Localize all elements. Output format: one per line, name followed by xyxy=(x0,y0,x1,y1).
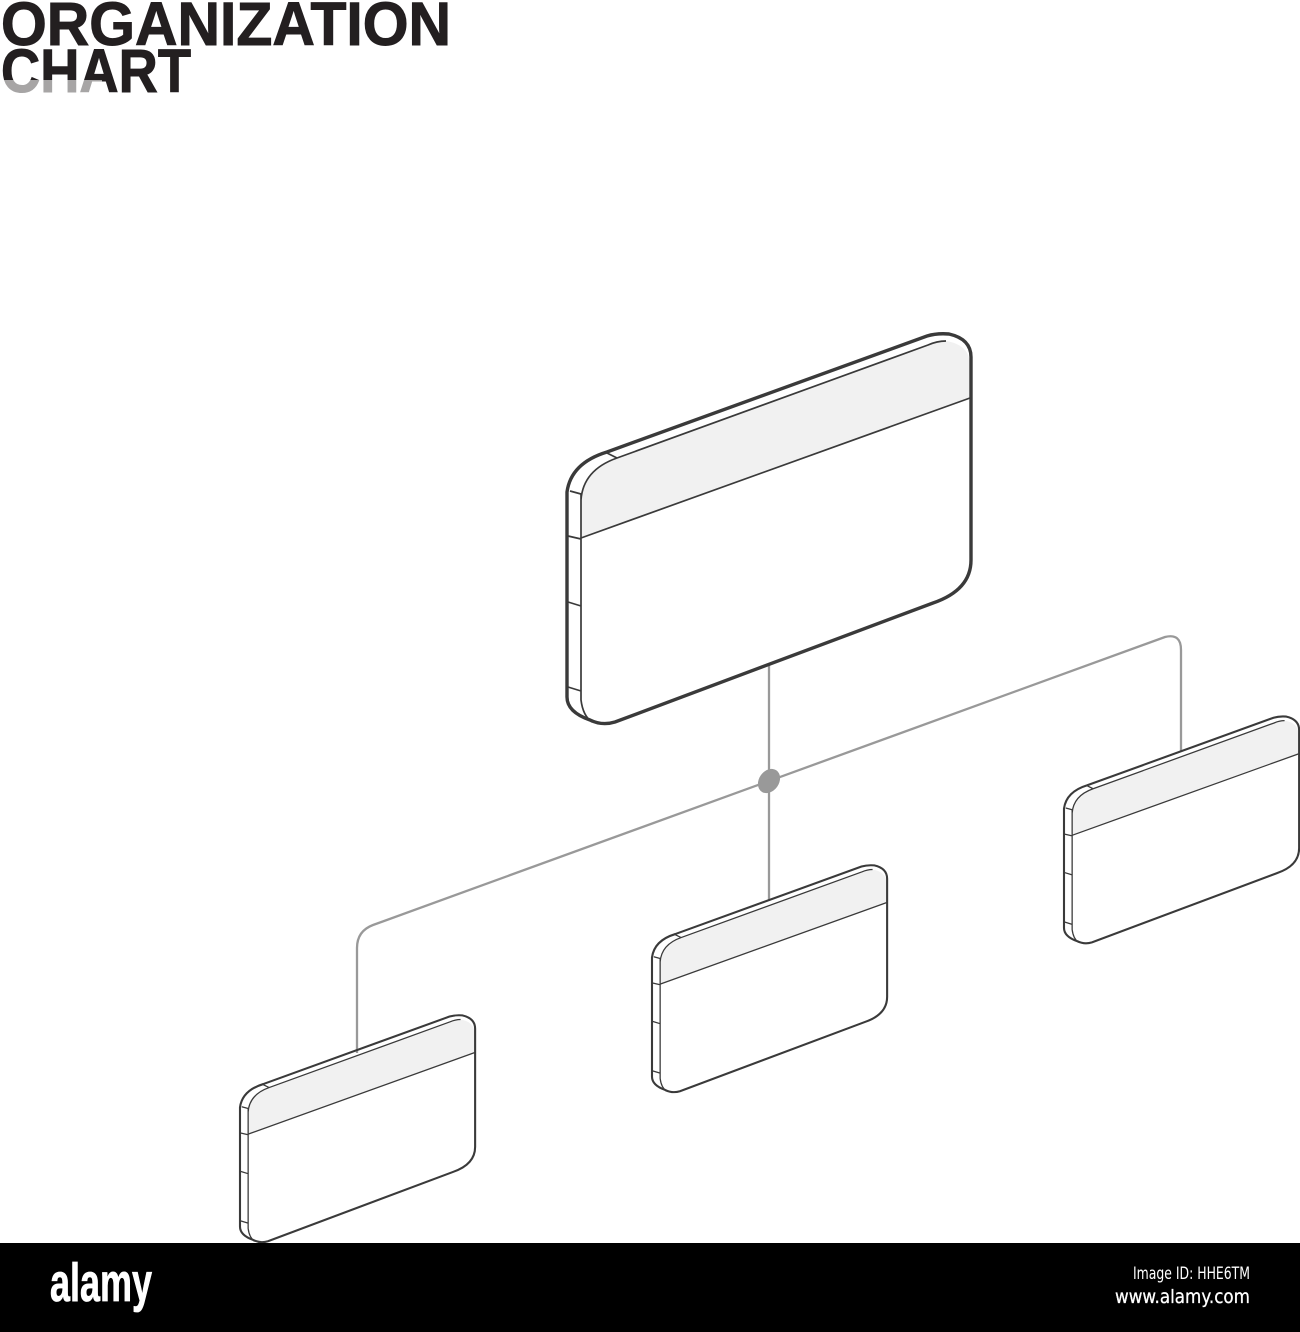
footer logo: alamy xyxy=(50,1253,152,1313)
panel: left card xyxy=(240,1015,475,1242)
connector lines xyxy=(357,636,1181,1053)
footer bar xyxy=(0,1243,1300,1332)
website: www.alamy.com xyxy=(1115,1286,1250,1308)
panel: middle card xyxy=(652,865,887,1092)
panel: top-level card xyxy=(567,334,971,724)
panel: right card xyxy=(1064,716,1299,943)
connector junction dot xyxy=(753,765,785,797)
title: CHART xyxy=(1,37,191,105)
title xyxy=(0,0,451,105)
image id: Image ID: HHE6TM xyxy=(1133,1264,1250,1284)
